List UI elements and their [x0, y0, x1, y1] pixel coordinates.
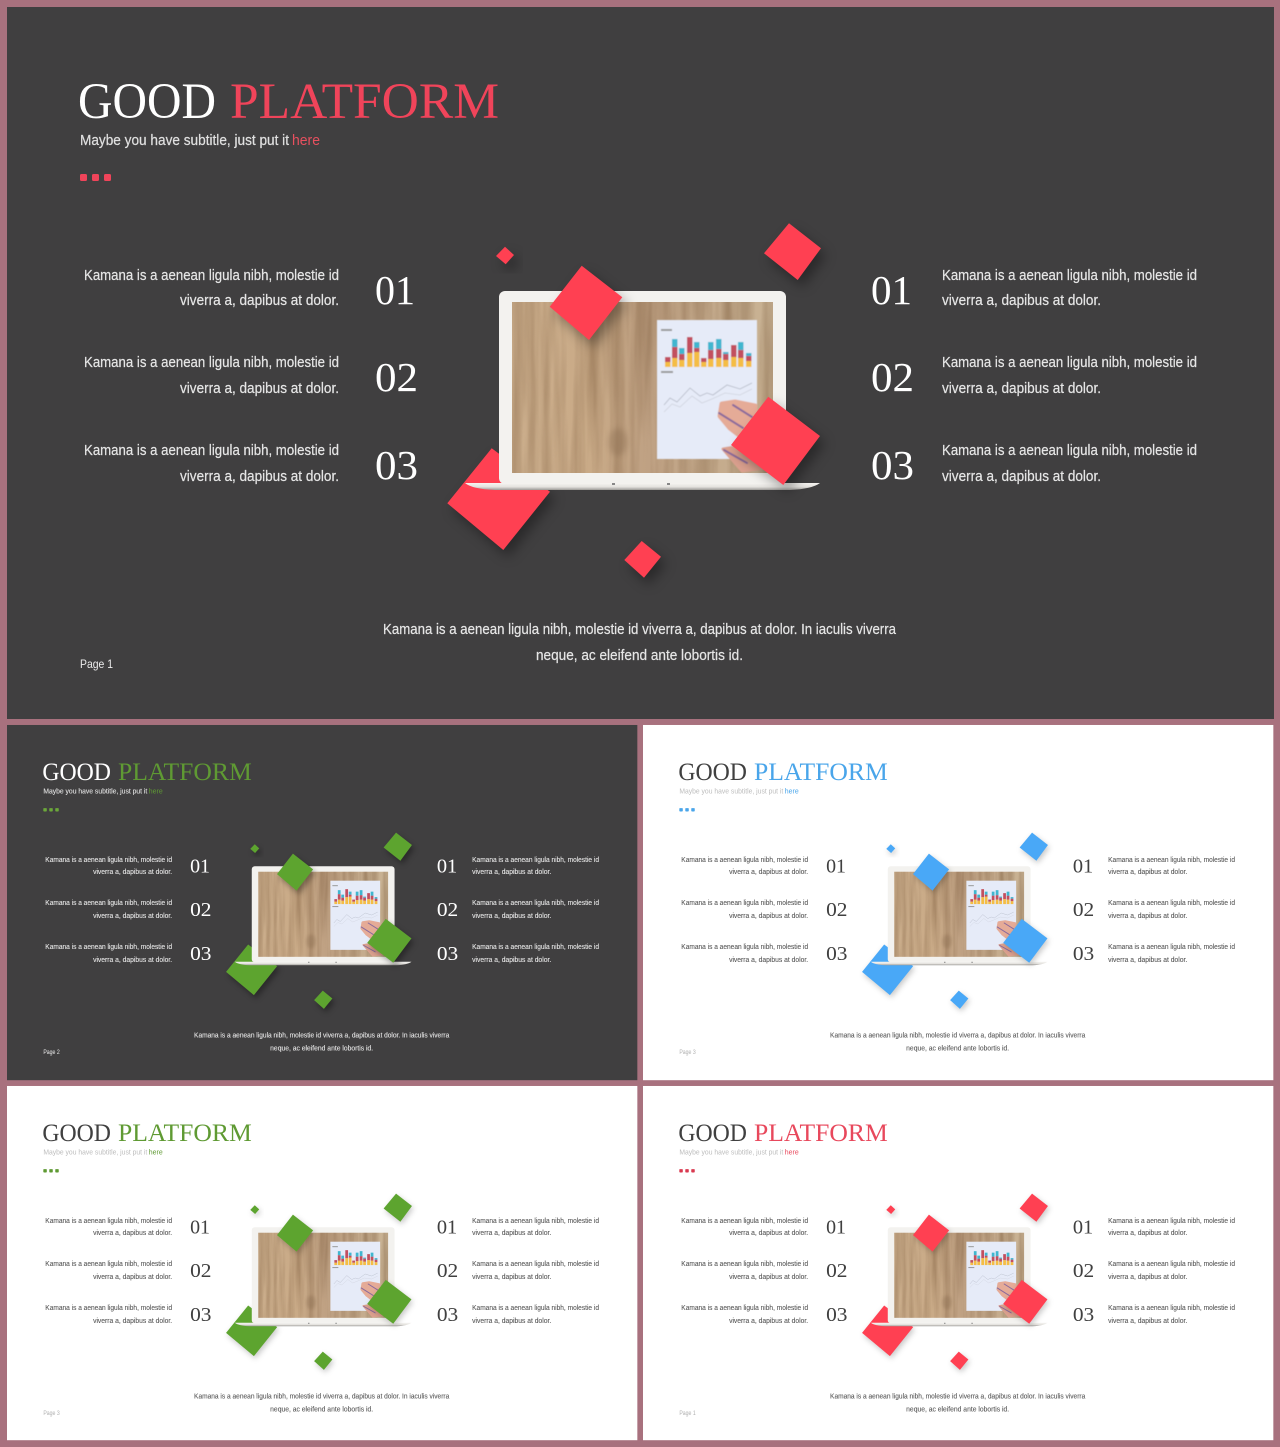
right list: 03 — [437, 943, 458, 965]
right list: Kamana is a aenean ligula nibh, molestie id — [472, 855, 599, 864]
bottom text: neque, ac eleifend ante lobortis id. — [270, 1404, 373, 1413]
left list: viverra a, dapibus at dolor. — [729, 1272, 808, 1281]
right list: 01 — [437, 856, 457, 878]
subtitle: here — [149, 787, 163, 796]
left list: Kamana is a aenean ligula nibh, molestie id — [45, 898, 172, 907]
title — [678, 1119, 888, 1147]
left list: 01 — [826, 1217, 846, 1239]
bottom text: neque, ac eleifend ante lobortis id. — [906, 1043, 1009, 1052]
laptop with diamonds — [447, 223, 821, 578]
left list: viverra a, dapibus at dolor. — [93, 955, 172, 964]
right list: Kamana is a aenean ligula nibh, molestie id — [1108, 1216, 1235, 1225]
left list: 02 — [826, 1260, 847, 1282]
right list: viverra a, dapibus at dolor. — [472, 1228, 551, 1237]
subtitle: here — [292, 133, 320, 149]
left list: Kamana is a aenean ligula nibh, molestie id — [84, 268, 339, 284]
right list: viverra a, dapibus at dolor. — [472, 1316, 551, 1325]
left list: viverra a, dapibus at dolor. — [180, 381, 339, 397]
right list: Kamana is a aenean ligula nibh, molestie id — [942, 268, 1197, 284]
subtitle: here — [785, 787, 799, 796]
bottom text — [383, 622, 897, 664]
left list: Kamana is a aenean ligula nibh, molestie id — [45, 1259, 172, 1268]
left list: viverra a, dapibus at dolor. — [729, 955, 808, 964]
panel: small dark slide, green accent — [7, 725, 637, 1080]
bottom text: neque, ac eleifend ante lobortis id. — [906, 1404, 1009, 1413]
left list: Kamana is a aenean ligula nibh, molestie id — [681, 1216, 808, 1225]
left list: 02 — [190, 899, 211, 921]
right list: Kamana is a aenean ligula nibh, molestie id — [472, 898, 599, 907]
title: GOOD — [78, 74, 216, 130]
left list: viverra a, dapibus at dolor. — [180, 469, 339, 485]
left list: viverra a, dapibus at dolor. — [93, 1228, 172, 1237]
left list: viverra a, dapibus at dolor. — [180, 293, 339, 309]
title: GOOD — [42, 758, 111, 786]
right list: viverra a, dapibus at dolor. — [1108, 1228, 1187, 1237]
title: PLATFORM — [754, 758, 888, 786]
panel: small white slide, green accent — [7, 1086, 637, 1440]
slide background — [7, 1086, 637, 1440]
right list: viverra a, dapibus at dolor. — [1108, 867, 1187, 876]
left list: Kamana is a aenean ligula nibh, molestie id — [681, 855, 808, 864]
left list — [45, 855, 211, 965]
page number: Page 1 — [679, 1411, 696, 1417]
accent dots — [80, 174, 111, 181]
accent dots — [43, 1169, 59, 1173]
left list: 03 — [826, 943, 847, 965]
right list: viverra a, dapibus at dolor. — [1108, 1316, 1187, 1325]
subtitle: here — [785, 1148, 799, 1157]
right list: 03 — [1073, 943, 1094, 965]
right list: viverra a, dapibus at dolor. — [472, 867, 551, 876]
right list — [1073, 855, 1235, 965]
right list: Kamana is a aenean ligula nibh, molestie id — [472, 1303, 599, 1312]
left list: Kamana is a aenean ligula nibh, molestie id — [45, 942, 172, 951]
title — [78, 74, 499, 130]
right list: viverra a, dapibus at dolor. — [1108, 955, 1187, 964]
subtitle: Maybe you have subtitle, just put it — [679, 1148, 783, 1157]
right list: 02 — [1073, 1260, 1094, 1282]
page number: Page 1 — [80, 657, 113, 671]
laptop with diamonds — [226, 1194, 412, 1370]
right list: Kamana is a aenean ligula nibh, molestie id — [472, 1216, 599, 1225]
title: PLATFORM — [754, 1119, 888, 1147]
right list: Kamana is a aenean ligula nibh, molestie id — [1108, 942, 1235, 951]
left list: Kamana is a aenean ligula nibh, molestie id — [45, 855, 172, 864]
right list: Kamana is a aenean ligula nibh, molestie id — [1108, 1303, 1235, 1312]
left list: viverra a, dapibus at dolor. — [93, 1272, 172, 1281]
subtitle: Maybe you have subtitle, just put it — [679, 787, 783, 796]
slide background — [7, 7, 1274, 719]
left list — [84, 267, 418, 488]
right list: Kamana is a aenean ligula nibh, molestie id — [1108, 1259, 1235, 1268]
bottom text: Kamana is a aenean ligula nibh, molestie id viverra a, dapibus at dolor. In iaculis viverra — [194, 1391, 449, 1400]
panel: small white slide, red accent — [643, 1086, 1273, 1440]
left list: viverra a, dapibus at dolor. — [93, 911, 172, 920]
right list: viverra a, dapibus at dolor. — [472, 955, 551, 964]
left list: 01 — [826, 856, 846, 878]
right list: 01 — [437, 1217, 457, 1239]
right list: Kamana is a aenean ligula nibh, molestie id — [1108, 855, 1235, 864]
left list: viverra a, dapibus at dolor. — [93, 867, 172, 876]
right list: 02 — [437, 1260, 458, 1282]
left list — [45, 1216, 211, 1326]
left list — [681, 855, 847, 965]
right list: viverra a, dapibus at dolor. — [942, 469, 1101, 485]
right list: 01 — [1073, 856, 1093, 878]
left list: Kamana is a aenean ligula nibh, molestie id — [681, 1303, 808, 1312]
left list: 02 — [826, 899, 847, 921]
slide background — [643, 725, 1273, 1080]
right list — [437, 855, 599, 965]
left list: Kamana is a aenean ligula nibh, molestie id — [84, 443, 339, 459]
bottom text — [830, 1391, 1085, 1413]
bottom text: neque, ac eleifend ante lobortis id. — [270, 1043, 373, 1052]
left list: viverra a, dapibus at dolor. — [729, 1228, 808, 1237]
left list — [681, 1216, 847, 1326]
left list: Kamana is a aenean ligula nibh, molestie id — [45, 1303, 172, 1312]
accent dots — [43, 808, 59, 812]
right list: viverra a, dapibus at dolor. — [472, 1272, 551, 1281]
bottom text — [830, 1030, 1085, 1052]
title — [42, 758, 252, 786]
left list: Kamana is a aenean ligula nibh, molestie id — [84, 355, 339, 371]
right list — [1073, 1216, 1235, 1326]
right list: 01 — [871, 267, 912, 313]
panel: small white slide, blue accent — [643, 725, 1273, 1080]
right list: 03 — [1073, 1304, 1094, 1326]
right list — [871, 267, 1197, 488]
title: PLATFORM — [118, 758, 252, 786]
left list: Kamana is a aenean ligula nibh, molestie id — [681, 1259, 808, 1268]
right list: viverra a, dapibus at dolor. — [942, 293, 1101, 309]
right list: 01 — [1073, 1217, 1093, 1239]
title: GOOD — [42, 1119, 111, 1147]
title: GOOD — [678, 1119, 747, 1147]
right list: viverra a, dapibus at dolor. — [1108, 911, 1187, 920]
laptop with diamonds — [862, 1194, 1048, 1370]
left list: 02 — [375, 354, 418, 400]
left list: 03 — [190, 1304, 211, 1326]
bottom text: Kamana is a aenean ligula nibh, molestie id viverra a, dapibus at dolor. In iaculis viverra — [194, 1030, 449, 1039]
right list: viverra a, dapibus at dolor. — [942, 381, 1101, 397]
page number: Page 2 — [43, 1050, 60, 1056]
title: PLATFORM — [118, 1119, 252, 1147]
bottom text: Kamana is a aenean ligula nibh, molestie id viverra a, dapibus at dolor. In iaculis viverra — [830, 1391, 1085, 1400]
bottom text: Kamana is a aenean ligula nibh, molestie id viverra a, dapibus at dolor. In iaculis viverra — [383, 622, 897, 638]
left list: viverra a, dapibus at dolor. — [729, 867, 808, 876]
left list: viverra a, dapibus at dolor. — [93, 1316, 172, 1325]
subtitle: here — [149, 1148, 163, 1157]
left list: viverra a, dapibus at dolor. — [729, 911, 808, 920]
right list: Kamana is a aenean ligula nibh, molestie id — [1108, 898, 1235, 907]
left list: 02 — [190, 1260, 211, 1282]
laptop with diamonds — [226, 833, 412, 1009]
right list: 02 — [871, 354, 914, 400]
left list: 01 — [190, 856, 210, 878]
right list: 03 — [871, 442, 914, 488]
bottom text — [194, 1391, 449, 1413]
page number: Page 3 — [679, 1050, 696, 1056]
right list: viverra a, dapibus at dolor. — [1108, 1272, 1187, 1281]
slide background — [643, 1086, 1273, 1440]
right list: Kamana is a aenean ligula nibh, molestie id — [472, 1259, 599, 1268]
right list: 02 — [1073, 899, 1094, 921]
bottom text: Kamana is a aenean ligula nibh, molestie id viverra a, dapibus at dolor. In iaculis viverra — [830, 1030, 1085, 1039]
left list: 03 — [190, 943, 211, 965]
right list: Kamana is a aenean ligula nibh, molestie id — [942, 355, 1197, 371]
subtitle: Maybe you have subtitle, just put it — [43, 787, 147, 796]
left list: Kamana is a aenean ligula nibh, molestie id — [681, 942, 808, 951]
title: PLATFORM — [230, 74, 499, 130]
left list: 01 — [190, 1217, 210, 1239]
left list: 01 — [375, 267, 415, 313]
right list: viverra a, dapibus at dolor. — [472, 911, 551, 920]
right list: Kamana is a aenean ligula nibh, molestie id — [942, 443, 1197, 459]
title — [678, 758, 888, 786]
title — [42, 1119, 252, 1147]
left list: Kamana is a aenean ligula nibh, molestie id — [681, 898, 808, 907]
right list — [437, 1216, 599, 1326]
title: GOOD — [678, 758, 747, 786]
bottom text — [194, 1030, 449, 1052]
left list: 03 — [375, 442, 418, 488]
accent dots — [679, 1169, 695, 1173]
left list: viverra a, dapibus at dolor. — [729, 1316, 808, 1325]
left list: 03 — [826, 1304, 847, 1326]
laptop with diamonds — [862, 833, 1048, 1009]
subtitle: Maybe you have subtitle, just put it — [43, 1148, 147, 1157]
right list: 02 — [437, 899, 458, 921]
slide background — [7, 725, 637, 1080]
accent dots — [679, 808, 695, 812]
left list: Kamana is a aenean ligula nibh, molestie id — [45, 1216, 172, 1225]
page number: Page 3 — [43, 1411, 60, 1417]
subtitle: Maybe you have subtitle, just put it — [80, 133, 289, 149]
right list: Kamana is a aenean ligula nibh, molestie id — [472, 942, 599, 951]
right list: 03 — [437, 1304, 458, 1326]
panel: large dark slide, red accent — [7, 7, 1274, 719]
bottom text: neque, ac eleifend ante lobortis id. — [536, 648, 743, 664]
